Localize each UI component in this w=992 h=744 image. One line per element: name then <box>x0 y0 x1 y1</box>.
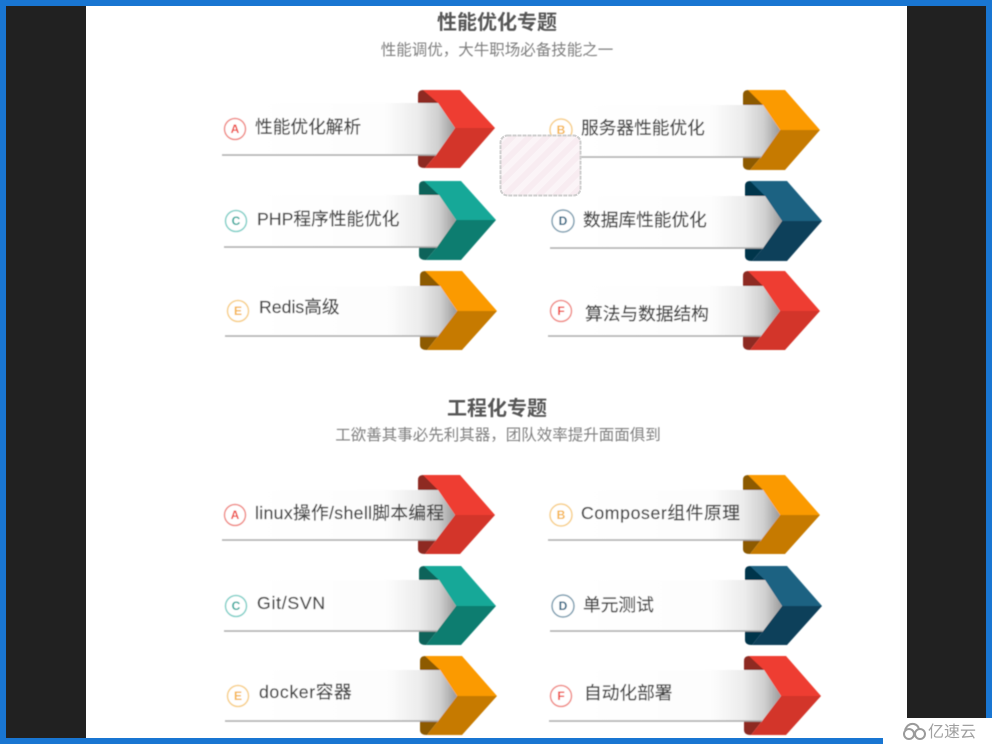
item B: server performance <box>548 90 820 170</box>
item A: linux and shell: linux操作/shell脚本编程 <box>255 503 444 523</box>
item E: docker: docker容器 <box>259 682 352 702</box>
item A: linux and shell <box>222 475 495 554</box>
item C: PHP performance: C <box>232 214 241 228</box>
section: performance optimization <box>222 11 822 350</box>
icon: cloud <box>904 724 925 739</box>
item B: server performance: B <box>557 123 566 137</box>
item A: performance analysis <box>222 90 495 168</box>
item C: Git/SVN: Git/SVN <box>257 593 326 613</box>
item A: performance analysis: A <box>231 122 240 136</box>
item D: database performance <box>550 181 822 261</box>
item D: unit testing: D <box>559 599 568 613</box>
subtitle: performance optimization: 性能调优，大牛职场必备技能之一 <box>381 41 613 59</box>
item A: performance analysis: 性能优化解析 <box>255 117 361 137</box>
item F: algorithms and data structures <box>548 271 820 350</box>
item D: unit testing: 单元测试 <box>583 595 654 615</box>
item E: docker: E <box>234 689 242 703</box>
item C: Git/SVN: C <box>232 599 241 613</box>
item F: automated deployment: F <box>557 689 565 703</box>
item B: server performance: 服务器性能优化 <box>581 118 705 138</box>
item F: algorithms and data structures: F <box>557 304 565 318</box>
item D: database performance: 数据库性能优化 <box>583 210 707 230</box>
item B: Composer: Composer组件原理 <box>581 503 741 523</box>
watermark: 亿速云 logo: 亿速云 <box>928 723 976 741</box>
item C: PHP performance: PHP程序性能优化 <box>257 209 400 229</box>
watermark: 亿速云 logo <box>904 723 976 741</box>
item F: automated deployment: 自动化部署 <box>584 683 672 703</box>
item C: Git/SVN <box>224 566 496 645</box>
item E: Redis advanced: E <box>234 304 242 318</box>
item C: PHP performance <box>224 181 496 260</box>
item F: algorithms and data structures: 算法与数据结构 <box>585 304 709 324</box>
item E: Redis advanced <box>225 271 497 350</box>
item D: database performance: D <box>559 214 568 228</box>
item E: Redis advanced: Redis高级 <box>259 297 340 317</box>
item D: unit testing <box>550 566 822 645</box>
item B: Composer: B <box>557 508 566 522</box>
item B: Composer <box>548 475 820 554</box>
subtitle: engineering: 工欲善其事必先利其器，团队效率提升面面俱到 <box>335 426 661 444</box>
heading: engineering: 工程化专题 <box>447 397 547 420</box>
heading: performance optimization: 性能优化专题 <box>437 11 557 34</box>
section: engineering <box>222 397 822 735</box>
item E: docker <box>225 656 497 735</box>
redacted placeholder box <box>500 136 580 196</box>
item A: linux and shell: A <box>231 508 240 522</box>
item F: automated deployment <box>549 656 821 735</box>
